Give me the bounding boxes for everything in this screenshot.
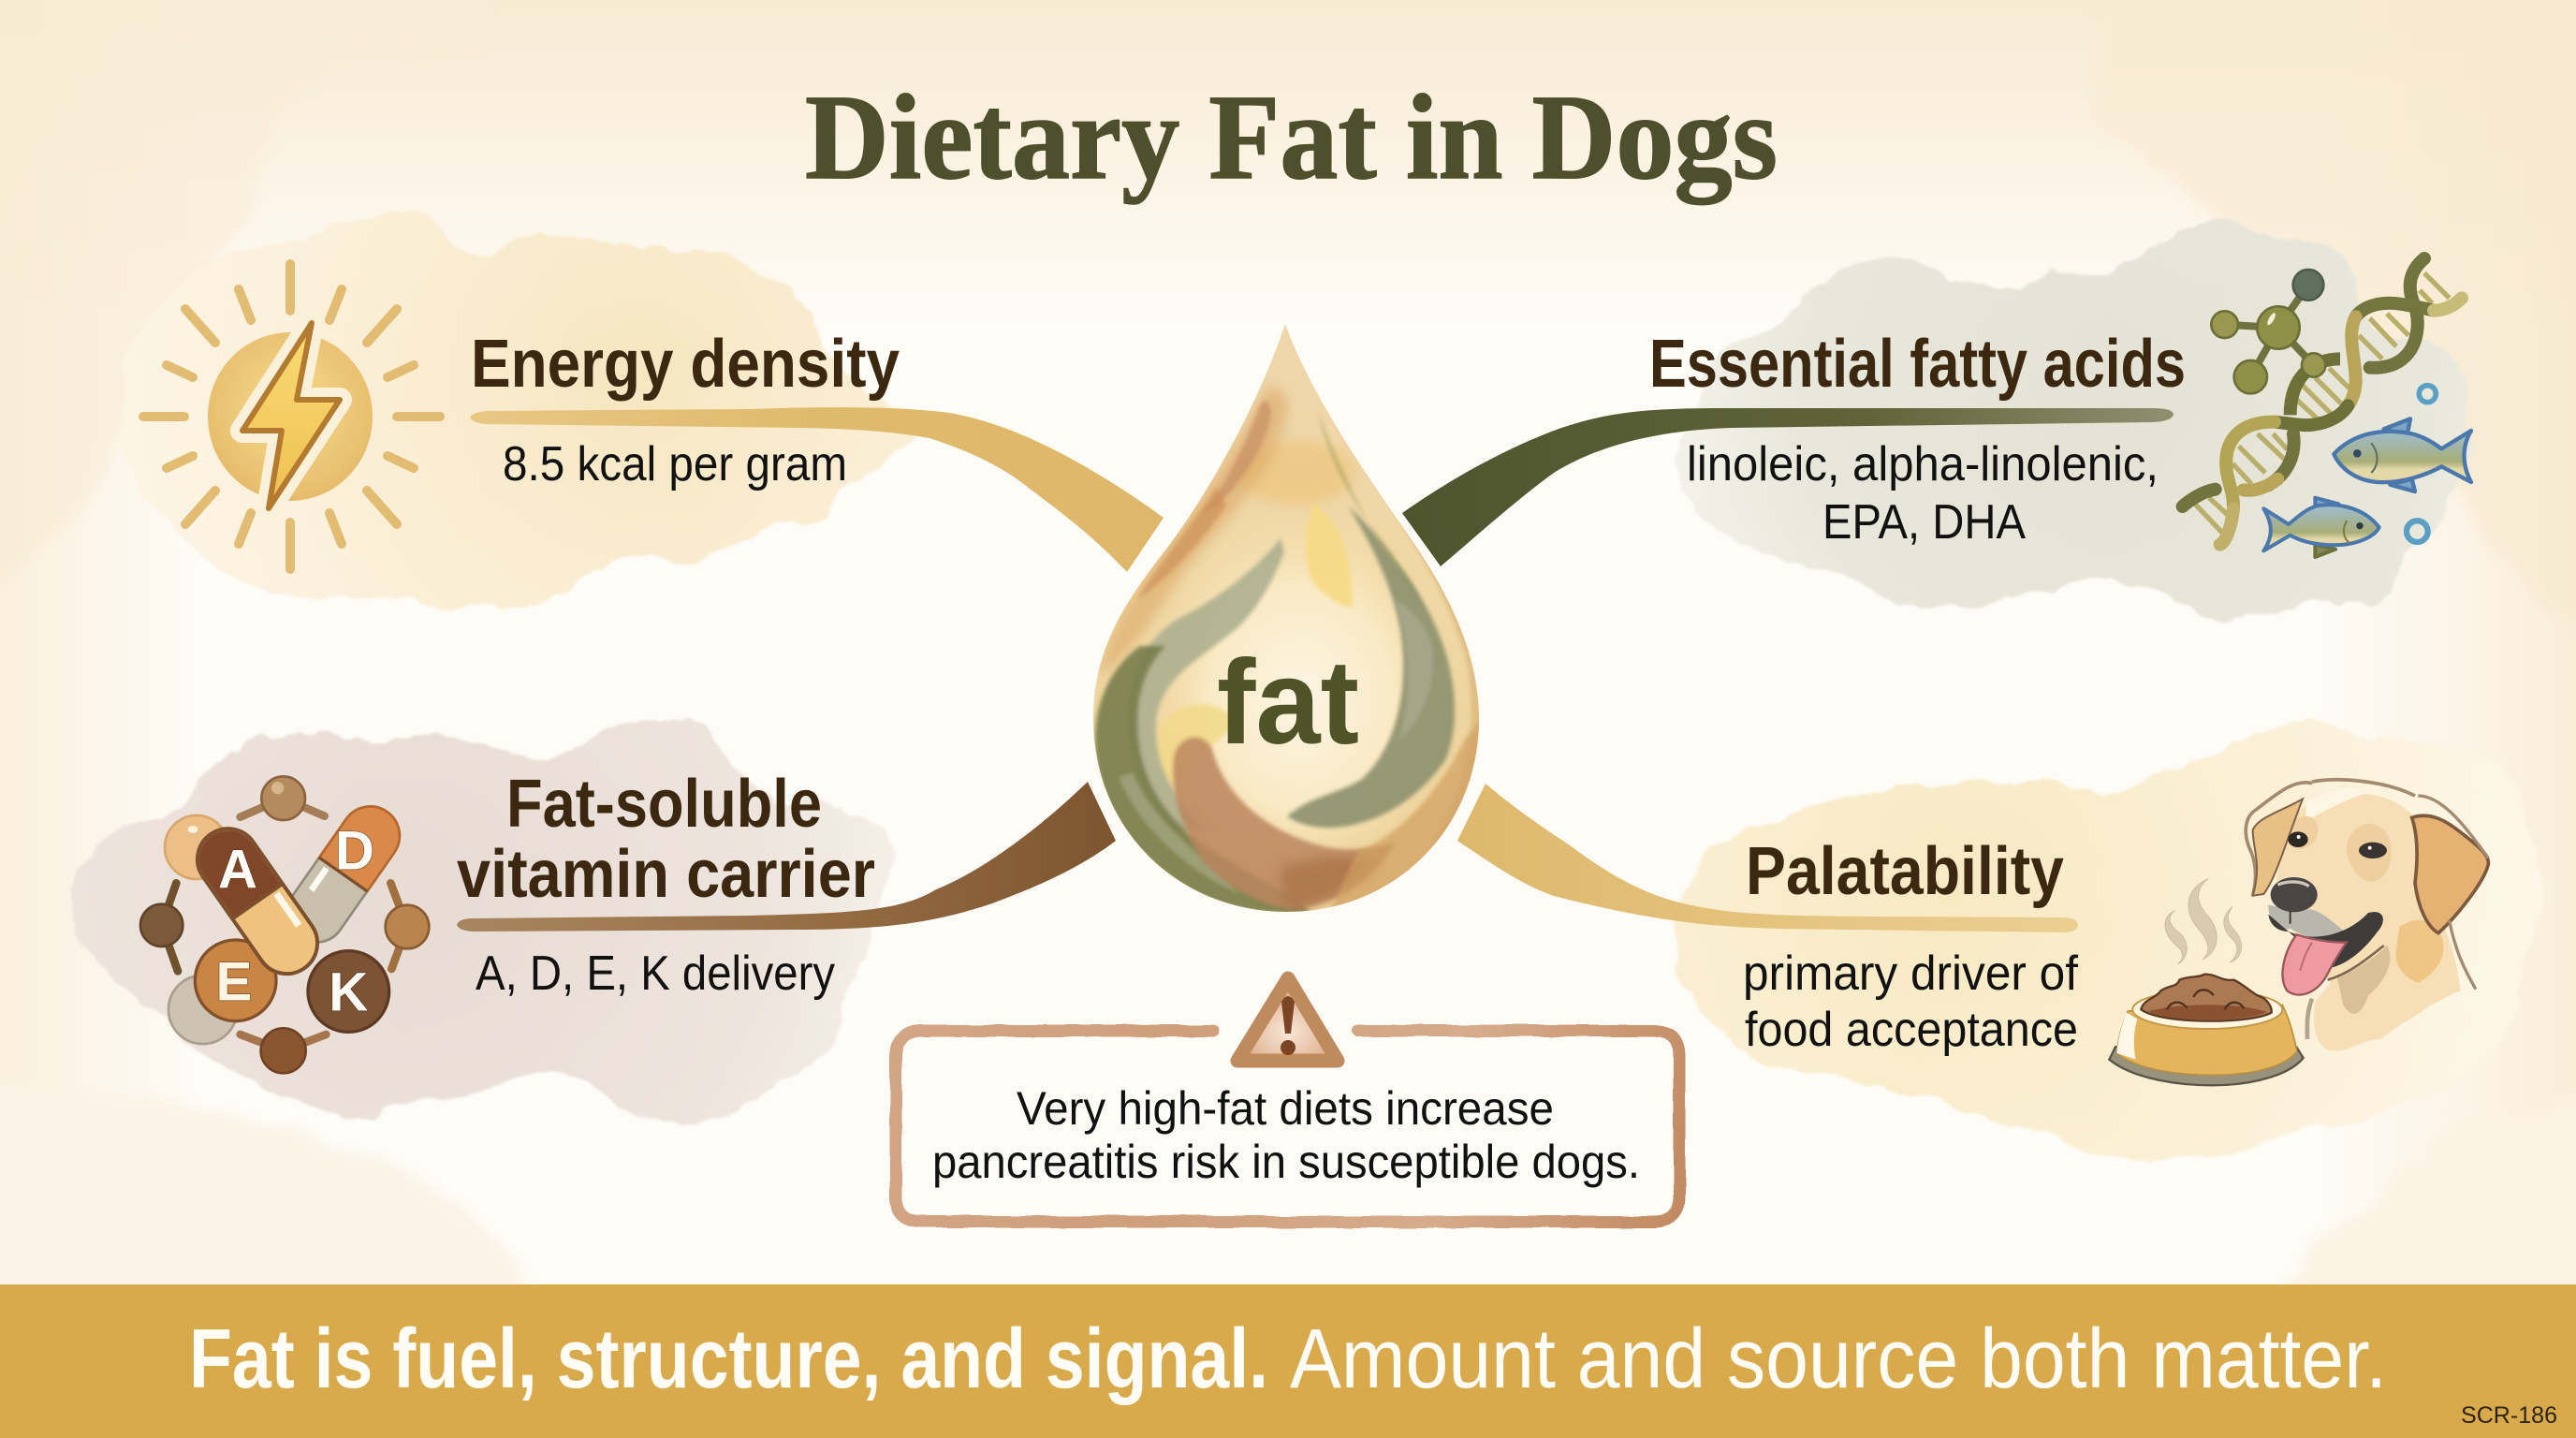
reference code: SCR-186 bbox=[2461, 1402, 2557, 1429]
dog head and neck bbox=[2275, 793, 2460, 1051]
heading: palatability: Palatability bbox=[1746, 834, 2064, 909]
orange left edge bbox=[1097, 387, 1287, 674]
watercolor wash: energy bbox=[122, 213, 909, 609]
warning frame bbox=[896, 1031, 1679, 1222]
fish large bbox=[2334, 418, 2471, 492]
mouth bbox=[2268, 912, 2383, 968]
heading: energy density: Energy density bbox=[471, 327, 900, 402]
right ear bbox=[2412, 815, 2488, 933]
left pale olive band bbox=[1128, 538, 1284, 833]
connector: essential fatty acids bbox=[1402, 408, 2174, 566]
bubbles bbox=[2419, 386, 2436, 403]
right rim tan bbox=[1329, 393, 1498, 843]
letter K: K bbox=[329, 961, 368, 1022]
circle K bbox=[308, 951, 389, 1032]
connector: energy density bbox=[470, 407, 1164, 572]
fish small bbox=[2263, 498, 2379, 557]
tongue bbox=[2283, 934, 2347, 995]
watercolor wash: fatty acids bbox=[1676, 227, 2469, 614]
panel: energy density bbox=[122, 213, 1164, 609]
heading: fat-soluble vitamin carrier bbox=[457, 767, 875, 912]
heading: essential fatty acids: Essential fatty acids bbox=[1649, 327, 2186, 402]
letter D: D bbox=[335, 820, 374, 881]
capsule A bbox=[185, 816, 329, 986]
steam bbox=[2165, 878, 2242, 964]
icon: happy dog with food bowl bbox=[2109, 780, 2488, 1085]
text: 8.5 kcal per gram: 8.5 kcal per gram bbox=[503, 437, 847, 492]
text: primary driver of food acceptance: food acceptance bbox=[1745, 1003, 2078, 1057]
left dark olive band bbox=[1095, 646, 1310, 914]
panel: fat-soluble vitamin carrier bbox=[69, 715, 1116, 1123]
warning text bbox=[932, 1082, 1640, 1188]
panel: palatability bbox=[1457, 724, 2539, 1153]
banner takeaway text bbox=[189, 1313, 2387, 1406]
connector: vitamin carrier bbox=[457, 782, 1116, 932]
bottom right tan bbox=[1329, 712, 1488, 913]
bottom banner bbox=[0, 1284, 2576, 1438]
label: fat: fat bbox=[1217, 636, 1359, 770]
text: fatty acid list: linoleic, alpha-linolenic, bbox=[1687, 437, 2159, 492]
DNA strands bbox=[2183, 258, 2462, 545]
warning text: pancreatitis risk in susceptible dogs. bbox=[932, 1136, 1640, 1188]
circle E bbox=[195, 940, 276, 1021]
icon: warning triangle bbox=[1237, 978, 1338, 1061]
nose bbox=[2271, 877, 2318, 912]
golden wash under the tip bbox=[1238, 441, 1354, 505]
left ear bbox=[2253, 799, 2303, 896]
text: A, D, E, K delivery: A, D, E, K delivery bbox=[476, 946, 835, 1001]
icon: molecule, DNA helix and fish bbox=[2183, 258, 2471, 557]
connector: palatability bbox=[1457, 784, 2078, 932]
muzzle bbox=[2268, 905, 2347, 938]
heading: fat-soluble vitamin carrier: Fat-soluble bbox=[506, 767, 822, 842]
molecule bbox=[2225, 285, 2314, 377]
icon: sun with lightning bolt bbox=[143, 264, 440, 569]
title: Dietary Fat in Dogs bbox=[805, 70, 1778, 205]
linked dots bbox=[162, 799, 407, 1050]
text: primary driver of food acceptance bbox=[1743, 946, 2079, 1057]
watercolor wash: palatability bbox=[1675, 724, 2539, 1153]
warning text: Very high-fat diets increase bbox=[1017, 1082, 1554, 1135]
capsule D bbox=[275, 795, 411, 954]
letter E: E bbox=[216, 951, 252, 1012]
upper olive streak bbox=[1318, 412, 1423, 609]
text: fatty acid list: EPA, DHA bbox=[1822, 495, 2026, 550]
background balls bbox=[165, 815, 228, 879]
bowl bbox=[2109, 1047, 2304, 1085]
text: fatty acid list bbox=[1687, 437, 2159, 550]
banner takeaway text: Fat is fuel, structure, and signal. bbox=[189, 1313, 1268, 1406]
yellow swirl bbox=[1306, 503, 1353, 607]
letter A: A bbox=[218, 839, 257, 900]
banner takeaway text: Amount and source both matter. bbox=[1290, 1313, 2387, 1406]
eyes bbox=[2288, 831, 2308, 847]
central oil drop bbox=[1086, 318, 1498, 917]
dog top outline bbox=[2246, 780, 2415, 896]
heading: fat-soluble vitamin carrier: vitamin carrier bbox=[457, 837, 875, 912]
DNA rungs bbox=[2195, 273, 2450, 534]
panel: essential fatty acids bbox=[1402, 227, 2471, 614]
cream centre bbox=[1168, 543, 1404, 848]
right olive band bbox=[1287, 506, 1455, 828]
food bbox=[2141, 975, 2272, 1021]
watercolor wash: vitamins bbox=[69, 715, 894, 1123]
brown swirl bbox=[1173, 738, 1395, 910]
text: primary driver of food acceptance: primary driver of bbox=[1743, 946, 2079, 1001]
callout: pancreatitis warning bbox=[896, 978, 1679, 1222]
icon: vitamin capsules bbox=[140, 776, 429, 1073]
